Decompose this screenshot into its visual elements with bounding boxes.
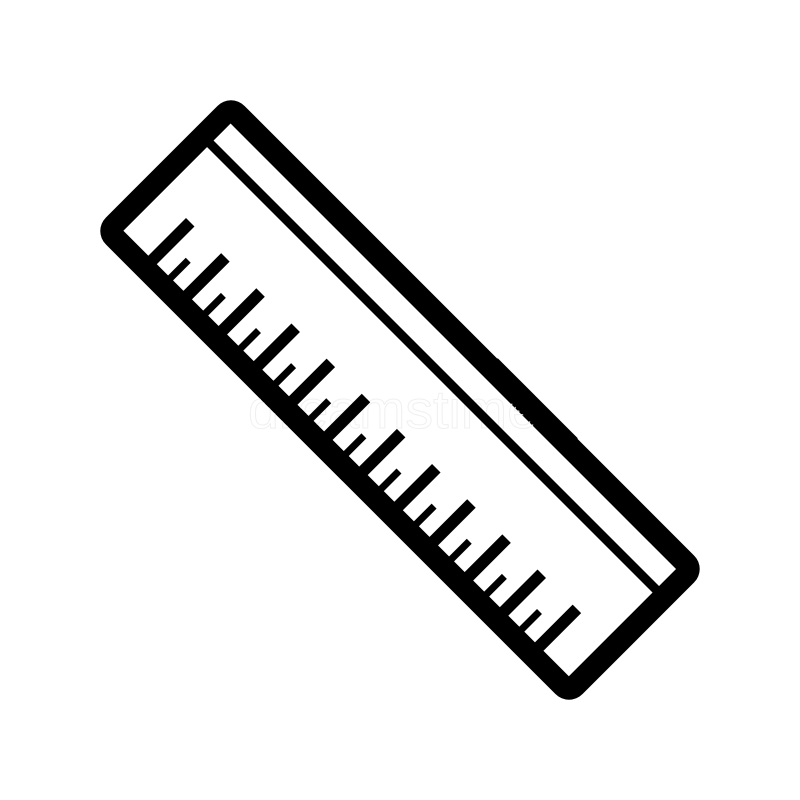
frame edge segment over watermark, upper right: [490, 366, 570, 446]
watermark text: dreamstime: [248, 380, 538, 440]
long tick marks: [151, 222, 577, 648]
watermark text: ®: [541, 418, 550, 432]
short tick marks: [169, 260, 540, 630]
frame edge segment over watermark, lower left: [260, 383, 350, 473]
ruler body frame: [92, 92, 708, 708]
top divider line: [200, 134, 666, 600]
